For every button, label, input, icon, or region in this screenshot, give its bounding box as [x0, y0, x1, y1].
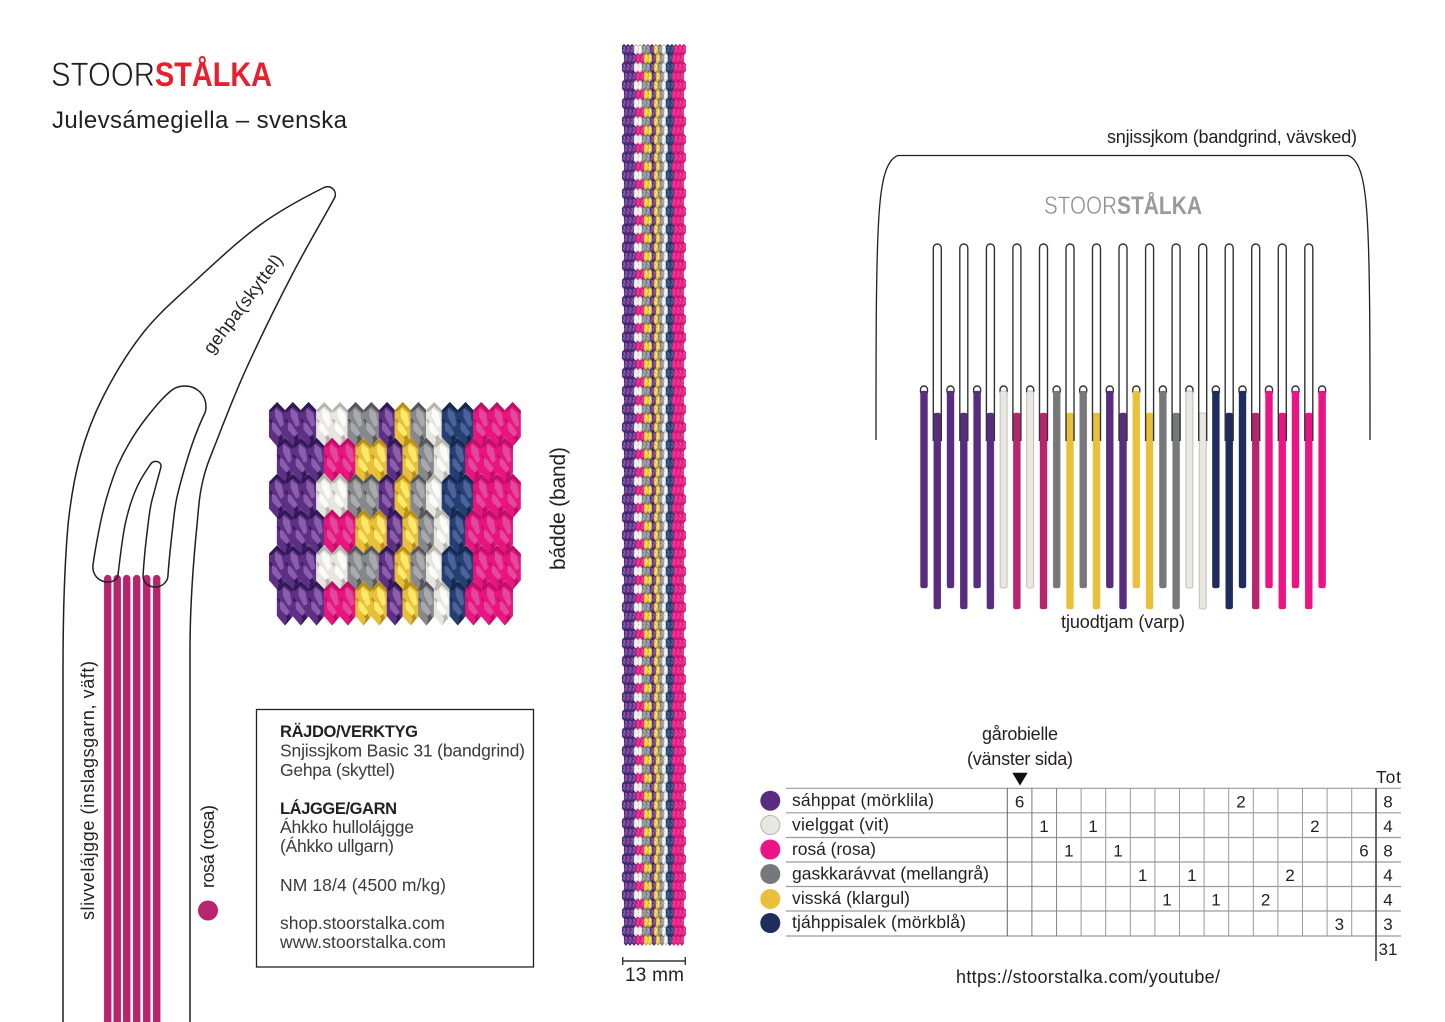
totals: 31	[1379, 940, 1397, 959]
row: rosá: 8	[1383, 842, 1393, 861]
heddle label: snjissjkom (bandgrind, vävsked)	[1107, 127, 1357, 147]
band sample pattern	[269, 402, 521, 626]
row: gaskkarávvat: 2	[1285, 866, 1295, 885]
row: gaskkarávvat	[760, 864, 1393, 885]
logo: Stoorstålka	[51, 56, 272, 94]
weft colour label: rosá (rosa)	[198, 805, 218, 888]
totals	[1376, 767, 1401, 959]
row: vielggat: 4	[1383, 817, 1393, 836]
shuttle outline	[63, 187, 335, 1022]
info box: LÁJGGE/GARN	[280, 799, 397, 818]
heddle holes	[920, 386, 1326, 395]
row: sáhppat: sáhppat (mörklila)	[792, 790, 934, 810]
info box: Áhkko hullolájgge	[280, 817, 414, 837]
info box: www.stoorstalka.com	[279, 932, 446, 952]
row: gaskkarávvat: 1	[1187, 866, 1197, 885]
row: vielggat: vielggat (vit)	[792, 814, 889, 834]
row: sáhppat: 8	[1383, 792, 1393, 811]
threading table	[760, 767, 1401, 961]
heddle frame	[876, 156, 1370, 440]
row: sáhppat	[760, 790, 1393, 811]
table header: selvedge label: gårobielle	[982, 724, 1058, 744]
band label: bádde (band)	[547, 447, 570, 570]
row: rosá	[760, 839, 1393, 861]
row: tjáhppisalek: tjáhppisalek (mörkblå)	[792, 912, 966, 932]
weft threads	[104, 575, 160, 1022]
info box: RÄJDO/VERKTYG	[280, 723, 418, 741]
table header: selvedge label: (vänster sida)	[967, 749, 1073, 769]
row: visská	[760, 888, 1393, 910]
selvedge arrow	[1012, 773, 1028, 786]
row: tjáhppisalek	[760, 912, 1393, 934]
row: visská: 4	[1383, 890, 1393, 910]
shuttle label: gehpa(skyttel)	[199, 250, 287, 357]
weft label: slivvelájgge (inslagsgarn, väft)	[78, 661, 98, 920]
row: tjáhppisalek: 3	[1383, 915, 1393, 934]
row: visská: 2	[1261, 890, 1270, 910]
heddle logo: STOOR	[1044, 192, 1117, 220]
logo: Stoorstålka: STÅLKA	[155, 56, 272, 94]
info box: Gehpa (skyttel)	[280, 760, 395, 780]
row: visská: 1	[1162, 890, 1172, 910]
row: gaskkarávvat: 4	[1383, 866, 1393, 885]
warp label: tjuodtjam (varp)	[1061, 612, 1185, 632]
row: sáhppat: 2	[1236, 792, 1246, 811]
row: rosá: rosá (rosa)	[792, 839, 876, 859]
info box: NM 18/4 (4500 m/kg)	[280, 875, 446, 895]
row: visská: 1	[1211, 890, 1221, 910]
info box: shop.stoorstalka.com	[280, 913, 445, 933]
row: tjáhppisalek: 3	[1335, 915, 1344, 934]
weft colour dot	[198, 900, 218, 920]
info box: Snjissjkom Basic 31 (bandgrind)	[280, 740, 525, 760]
row: vielggat: 1	[1088, 817, 1098, 836]
subtitle: Julevsámegiella – svenska	[52, 107, 348, 134]
heddle logo: STÅLKA	[1117, 191, 1202, 220]
heddle logo	[1044, 191, 1202, 220]
woven band, full length	[622, 44, 686, 946]
info box: (Áhkko ullgarn)	[280, 836, 394, 856]
row: visská: visská (klargul)	[792, 888, 910, 908]
band width scale: 13 mm	[625, 965, 684, 986]
table header: selvedge label	[967, 724, 1073, 769]
info box	[256, 710, 534, 967]
heddle slots	[933, 244, 1313, 441]
warp threads	[920, 391, 1326, 609]
band width scale	[623, 957, 685, 986]
row: rosá: 1	[1064, 842, 1074, 861]
row: vielggat: 2	[1310, 817, 1320, 836]
row: rosá: 6	[1359, 842, 1369, 861]
row: vielggat: 1	[1039, 817, 1049, 836]
row: rosá: 1	[1113, 842, 1123, 861]
logo: Stoorstålka: STOOR	[51, 56, 155, 94]
video link: https://stoorstalka.com/youtube/	[956, 967, 1220, 987]
row: gaskkarávvat: gaskkarávvat (mellangrå)	[792, 864, 989, 884]
row: vielggat	[761, 814, 1393, 836]
row: gaskkarávvat: 1	[1138, 866, 1147, 885]
totals: Tot	[1376, 767, 1401, 787]
row: sáhppat: 6	[1015, 792, 1024, 811]
